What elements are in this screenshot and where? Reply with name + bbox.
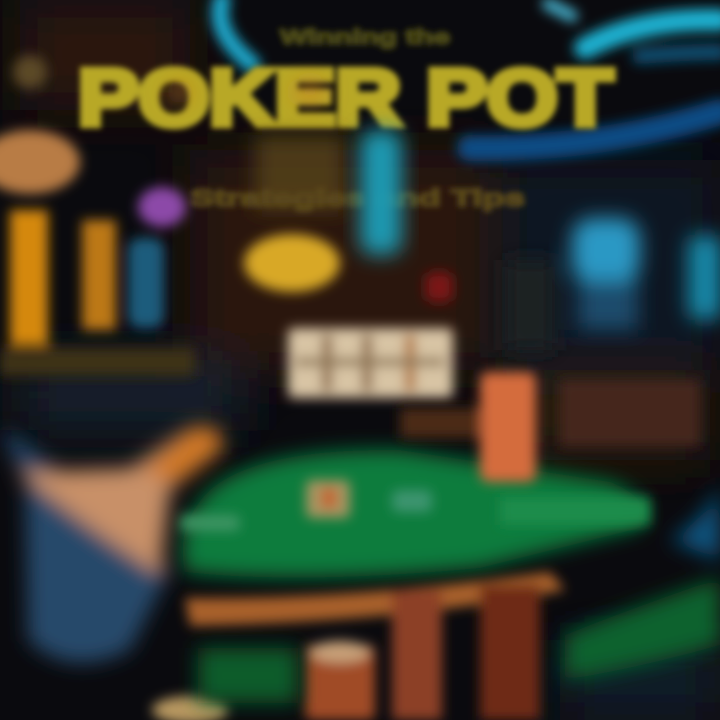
- table rim and chips: [152, 572, 565, 720]
- main title: POKER POT: [78, 53, 613, 142]
- sleeve: [0, 430, 170, 663]
- hanging lamp: [244, 234, 340, 292]
- red lamp: [425, 272, 453, 302]
- left lamp and candles: [0, 55, 195, 376]
- poker table: [182, 450, 644, 578]
- lower green felt: [198, 485, 720, 703]
- table markings: [180, 480, 650, 531]
- right blue lamps: [505, 218, 720, 350]
- neon arcs top right: [220, 0, 720, 148]
- headline: [78, 26, 613, 212]
- fingers: [145, 426, 222, 485]
- subtitle: Strategies and Tips: [190, 185, 525, 212]
- cards: [288, 328, 453, 398]
- hand: [18, 426, 222, 575]
- orange drink: [400, 372, 700, 482]
- player arm and hand: [0, 426, 222, 663]
- cyan column: [360, 130, 402, 255]
- title glow: [166, 78, 345, 210]
- kicker: Winning the: [280, 26, 450, 49]
